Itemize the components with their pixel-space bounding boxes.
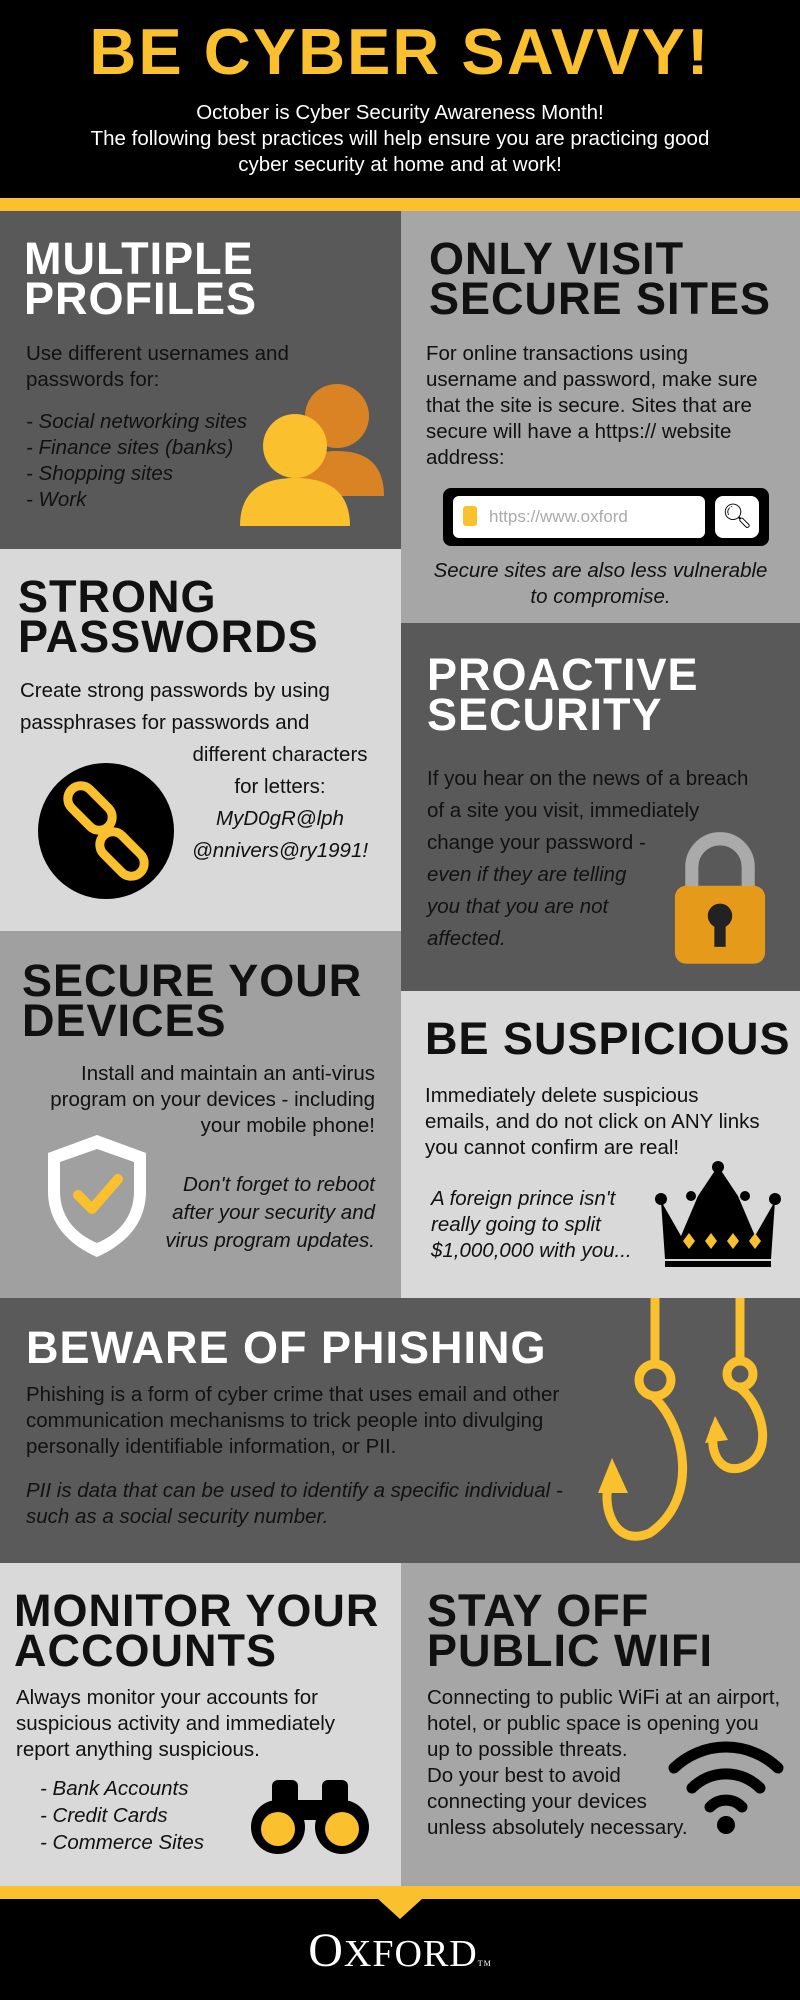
text: Immediately delete suspicious — [425, 1084, 698, 1107]
text: username and password, make sure — [426, 368, 758, 391]
note: such as a social security number. — [26, 1505, 328, 1528]
text — [20, 679, 330, 734]
note: to compromise. — [530, 585, 671, 608]
icon: browser bar — [443, 488, 769, 546]
heading: MONITOR YOUR — [14, 1585, 379, 1636]
text: passphrases for passwords and — [20, 711, 309, 734]
heading — [18, 571, 319, 662]
text: personally identifiable information, or PII. — [26, 1435, 396, 1458]
note — [26, 1479, 563, 1528]
text — [26, 342, 289, 391]
icon: shield — [48, 1135, 146, 1257]
text: connecting your devices — [427, 1790, 647, 1813]
heading: MULTIPLE — [24, 233, 254, 284]
heading — [429, 233, 771, 324]
heading — [14, 1585, 379, 1676]
text: Connecting to public WiFi at an airport, — [427, 1686, 780, 1709]
note: really going to split — [431, 1213, 601, 1236]
text: emails, and do not click on ANY links — [425, 1110, 760, 1133]
text: Create strong passwords by using — [20, 679, 330, 702]
title: BE CYBER SAVVY! — [89, 15, 711, 88]
icon: people — [240, 384, 384, 526]
text: you cannot confirm are real! — [425, 1136, 679, 1159]
text: secure will have a https:// website — [426, 420, 731, 443]
list: - Social networking sites — [26, 410, 247, 433]
footer: oxford logo — [0, 1899, 800, 2000]
icon: browser bar: 🔍︎ — [722, 503, 752, 530]
text: you that you are not — [427, 895, 608, 918]
text: your mobile phone! — [201, 1114, 375, 1137]
subtitle — [91, 101, 709, 176]
text: even if they are telling — [427, 863, 626, 886]
note: A foreign prince isn't — [431, 1187, 615, 1210]
heading: ACCOUNTS — [14, 1625, 277, 1676]
text: Phishing is a form of cyber crime that uses email and other — [26, 1383, 559, 1406]
note: $1,000,000 with you... — [431, 1239, 632, 1262]
text — [426, 342, 758, 469]
text: suspicious activity and immediately — [16, 1712, 335, 1735]
panel: strong passwords: for letters: — [234, 775, 326, 798]
heading — [427, 1585, 713, 1676]
text — [16, 1686, 335, 1761]
panel: strong passwords: MyD0gR@lph — [216, 807, 344, 830]
text: up to possible threats. — [427, 1738, 628, 1761]
panel: public wifi — [401, 1563, 800, 1886]
list — [40, 1777, 204, 1854]
text: that the site is secure. Sites that are — [426, 394, 752, 417]
list: - Work — [26, 488, 86, 511]
panel: secure devices — [0, 931, 401, 1298]
panel: strong passwords: @nnivers@ry1991! — [192, 839, 368, 862]
panel: strong passwords: different characters — [192, 743, 368, 766]
note — [165, 1173, 376, 1252]
icon: binoculars — [251, 1780, 369, 1854]
icon: wifi — [668, 1742, 784, 1834]
panel: secure sites — [401, 211, 800, 623]
text: passwords for: — [26, 368, 159, 391]
panel: multiple profiles — [0, 211, 401, 549]
subtitle: The following best practices will help ensure you are practicing good — [91, 127, 709, 150]
text — [426, 767, 748, 950]
heading — [427, 649, 699, 740]
note: virus program updates. — [165, 1229, 375, 1252]
text: change your password - — [427, 831, 646, 854]
heading — [22, 955, 362, 1046]
text: report anything suspicious. — [16, 1738, 260, 1761]
list: - Finance sites (banks) — [26, 436, 233, 459]
text: Do your best to avoid — [427, 1764, 621, 1787]
text — [50, 1062, 375, 1137]
text — [26, 1383, 559, 1458]
panel: strong passwords — [0, 549, 401, 931]
panel: proactive — [401, 623, 800, 991]
text: hotel, or public space is opening you — [427, 1712, 759, 1735]
text — [427, 1686, 780, 1839]
list: - Shopping sites — [26, 462, 173, 485]
heading: ONLY VISIT — [429, 233, 684, 284]
text: Install and maintain an anti-virus — [81, 1062, 375, 1085]
note — [430, 1187, 632, 1262]
heading: SECURE SITES — [429, 273, 771, 324]
icon: crown — [655, 1161, 781, 1267]
text: If you hear on the news of a breach — [427, 767, 748, 790]
text: address: — [426, 446, 505, 469]
heading: DEVICES — [22, 995, 227, 1046]
panel: phishing — [0, 1298, 800, 1563]
list: - Credit Cards — [40, 1804, 168, 1827]
panel: monitor accounts — [0, 1563, 401, 1886]
text: Always monitor your accounts for — [16, 1686, 318, 1709]
subtitle: October is Cyber Security Awareness Month! — [196, 101, 604, 124]
logo text: OXFORDTM — [308, 1924, 492, 1977]
icon: hooks — [598, 1298, 768, 1541]
text: communication mechanisms to trick people into divulging — [26, 1409, 543, 1432]
heading: PASSWORDS — [18, 611, 319, 662]
icon: browser bar: https://www.oxford — [489, 507, 628, 526]
text: For online transactions using — [426, 342, 688, 365]
heading: SECURITY — [427, 689, 663, 740]
list — [26, 410, 247, 511]
heading: PROACTIVE — [427, 649, 699, 700]
note — [434, 559, 767, 608]
heading: STRONG — [18, 571, 217, 622]
heading: SECURE YOUR — [22, 955, 362, 1006]
heading: PUBLIC WIFI — [427, 1625, 713, 1676]
text: Use different usernames and — [26, 342, 289, 365]
icon: padlock — [674, 832, 766, 964]
note: after your security and — [172, 1201, 375, 1224]
list: - Commerce Sites — [40, 1831, 204, 1854]
text: unless absolutely necessary. — [427, 1816, 688, 1839]
text: program on your devices - including — [50, 1088, 375, 1111]
header — [0, 0, 800, 198]
icon: chain — [38, 763, 174, 899]
note: PII is data that can be used to identify a specific individual - — [26, 1479, 563, 1502]
heading: BE SUSPICIOUS — [425, 1013, 791, 1064]
heading: STAY OFF — [427, 1585, 649, 1636]
heading — [24, 233, 257, 324]
text: of a site you visit, immediately — [427, 799, 699, 822]
note: Don't forget to reboot — [183, 1173, 375, 1196]
text: affected. — [427, 927, 506, 950]
heading: BEWARE OF PHISHING — [26, 1322, 547, 1373]
panel: be suspicious — [401, 991, 800, 1298]
list: - Bank Accounts — [40, 1777, 189, 1800]
note: Secure sites are also less vulnerable — [434, 559, 767, 582]
logo chevron — [378, 1899, 422, 1919]
text — [425, 1084, 760, 1159]
subtitle: cyber security at home and at work! — [238, 153, 562, 176]
heading: PROFILES — [24, 273, 257, 324]
